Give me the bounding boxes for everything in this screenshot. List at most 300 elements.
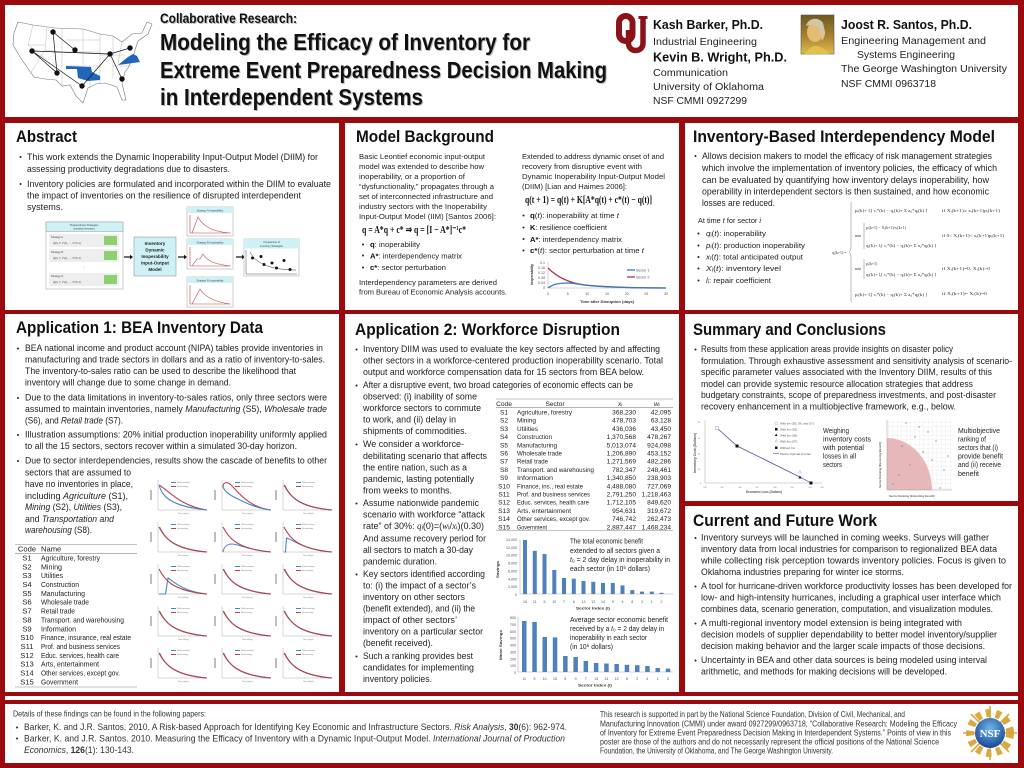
application 2 text: scenario with workforce “attack — [363, 510, 486, 520]
application 2 text: inventory policies. — [363, 674, 432, 684]
references: Economics, 126(1): 130-143. — [24, 745, 134, 755]
line chart: inoperability over time: 0 — [547, 292, 549, 296]
bar chart: mean savings by sector: 500 — [510, 637, 516, 641]
left column text: Input-Output Model (IIM) [Santos 2006]: — [359, 212, 496, 221]
chart S11: No inventory — [241, 611, 252, 614]
caption: weighing inventory costs: inventory costs — [823, 434, 871, 444]
application 2 text: Inventory DIIM was used to evaluate the key sectors affected by and affecting — [363, 344, 660, 354]
authors: George Washington University: Systems Engineering — [857, 50, 955, 61]
application 1 text: Mining (S2), Utilities (S3), — [25, 502, 122, 512]
future work text: Inventory surveys will be launched in coming weeks. Surveys will gather — [701, 532, 989, 542]
equation: piecewise inventory model: min — [855, 267, 861, 271]
application 2 text: to work, and (ii) delay in — [363, 414, 456, 424]
chart S12 — [276, 606, 332, 641]
bar chart: mean savings by sector: 800 — [510, 616, 516, 620]
future work text: arithmetic, and methods for making decisions will be developed. — [701, 666, 947, 676]
table: sector output and workforce: Information — [517, 475, 553, 482]
bar chart: mean savings by sector: 1 — [657, 677, 659, 681]
bar chart: mean savings by sector: 300 — [510, 650, 516, 654]
table: sector codes: Educ. services, health care — [41, 651, 119, 660]
line chart: inoperability over time: 30 — [664, 292, 668, 296]
authors: George Washington University: Joost R. Santos, Ph.D. — [841, 17, 972, 32]
bar chart: mean savings by sector: 6 — [564, 677, 566, 681]
chart S9: Time (days) — [303, 597, 314, 599]
line chart: inoperability over time: Sector 2 — [636, 276, 649, 280]
table: sector codes: Mining — [41, 562, 62, 571]
chart S11: With inventory — [241, 607, 254, 610]
table: sector codes: S5 — [22, 589, 32, 598]
bar chart: mean savings by sector: 9 — [575, 677, 577, 681]
equation: piecewise inventory model: pᵢ(k)+ lᵢ[ cᵢ*(k) − qᵢ(k)+ Σ aᵢⱼ*qⱼ(k) ] — [855, 208, 927, 213]
bar chart: mean savings by sector: 400 — [510, 644, 516, 648]
table: sector output and workforce: Code — [496, 401, 512, 408]
chart S4: Time (days) — [178, 555, 189, 557]
description text: losses are reduced. — [702, 198, 775, 208]
left column text: Basic Leontief economic input-output — [359, 152, 486, 161]
table: sector output and workforce: Retail trade — [517, 459, 548, 466]
application 1 text: BEA national income and product account (NIPA) tables provide inventories in — [25, 343, 323, 353]
panel: summary and conclusions — [685, 314, 1018, 501]
application 2 text: (benefit extended), and (ii) the — [363, 604, 475, 614]
chart S14 — [215, 648, 271, 683]
table: sector codes: Code — [18, 544, 36, 554]
table: sector codes: Other services, except gov. — [41, 668, 120, 678]
diagram: inventory strategies flow: Inoperability — [141, 254, 169, 259]
abstract text: Inventory policies are formulated and incorporated within the DIIM to evaluate — [27, 179, 331, 189]
equation: piecewise inventory model: pᵢ(k)+ lᵢ[ cᵢ*(k) − qᵢ(k)+ Σ aᵢⱼ*qⱼ(k) ] — [855, 292, 927, 297]
table: sector output and workforce: S7 — [500, 459, 508, 466]
table: sector output and workforce: Educ. services, health care — [517, 500, 589, 507]
summary text: Results from these application areas provide insights on disaster policy — [701, 344, 954, 354]
equation: DIIM: q(t + 1) = q(t) + K[A*q(t) + c*(t) − q(t)] — [525, 195, 652, 206]
table: sector output and workforce: 436,036 — [612, 426, 636, 433]
line chart: inoperability over time — [530, 261, 668, 304]
future work text: while collecting risk perception towards inventory policies. Focus is given to — [700, 556, 1006, 566]
annotation: total economic benefit: The total economic benefit — [570, 536, 644, 546]
table: sector codes: Wholesale trade — [41, 598, 89, 607]
application 1 text: to all the 15 sectors, sectors recover within a simulated 30-day horizon. — [25, 441, 297, 451]
chart S10: Time (days) — [178, 639, 189, 641]
summary text: formulation. Through exhaustive assessment and sensitivity analysis of scenario- — [701, 356, 1012, 366]
table: sector output and workforce: xᵢ — [617, 401, 622, 408]
bar chart: total savings by sector: 8,000 — [508, 562, 517, 566]
annotation: average sector benefit: inoperability in each sector — [570, 633, 647, 642]
bar chart: mean savings by sector: 8 — [626, 677, 628, 681]
table: sector output and workforce: 2,791,250 — [607, 492, 636, 498]
diagram: inventory strategies flow: Model — [148, 267, 162, 272]
authors: George Washington University — [841, 17, 1007, 90]
description text: can be evaluated by quantifying how inventory delays inoperability, how — [702, 175, 990, 185]
application 2 text: rate” of 30%: qᵢ(0)=(wᵢ/xᵢ)(0.30) — [363, 521, 484, 531]
icon: NSF seal — [963, 706, 1017, 760]
chart S2 — [215, 480, 271, 515]
bar chart: total savings by sector: Sector Index (i) — [576, 606, 611, 610]
line chart: inoperability over time: 25 — [644, 292, 648, 296]
table: sector codes: Retail trade — [41, 607, 75, 616]
chart S6 — [276, 522, 332, 557]
bar chart: total savings by sector: 10,000 — [506, 554, 517, 558]
table: sector codes: S6 — [22, 598, 32, 607]
diagram: inventory strategies flow: Input-Output — [141, 260, 169, 266]
variable list: At time t for sector i — [698, 216, 761, 225]
equation: piecewise inventory model — [832, 202, 1005, 302]
acknowledgement: Foundation, the University of Oklahoma, and The George Washington University. — [600, 746, 833, 756]
heading: application 1: Application 1: BEA Inventory Data — [16, 318, 264, 337]
line chart: inoperability over time: 0.16 — [538, 266, 545, 270]
application 2 text: Key sectors identified according — [363, 569, 485, 579]
IIM variable list — [362, 240, 462, 272]
caption: multiobjective ranking: provide benefit — [958, 452, 1004, 460]
line chart: inoperability over time: Time after Disruption (days) — [580, 300, 635, 304]
caption: multiobjective ranking — [958, 426, 1004, 478]
caption: multiobjective ranking: ranking of — [958, 434, 987, 444]
table: sector output and workforce: Construction — [517, 434, 552, 441]
variable list: pᵢ(t): production inoperability — [705, 241, 805, 250]
equation: piecewise inventory model: if Xᵢ(k+1)≥ xᵢ(k+1)pᵢ(k+1) — [942, 209, 1001, 213]
authors: George Washington University: NSF CMMI 0963718 — [841, 79, 936, 90]
table: sector output and workforce: S5 — [500, 442, 508, 449]
authors: University of Oklahoma: Kevin B. Wright, Ph.D. — [653, 50, 787, 64]
bar chart: mean savings by sector: Mean Savings — [499, 630, 503, 660]
diagram: inventory strategies flow: Inventory Strategies — [260, 244, 284, 248]
line chart: inoperability over time: 0.04 — [538, 281, 545, 285]
acknowledgement: of Inventory for Extreme Event Preparedness Decision Making in Interdependent Systems.” Points of view in this — [600, 728, 951, 738]
panel: model background — [345, 123, 679, 310]
bar chart: mean savings by sector: 2 — [636, 677, 638, 681]
chart: pareto frontier: Inventory Cost (Dollars) — [693, 433, 697, 473]
bar chart: total savings by sector: 1 — [651, 600, 653, 604]
table: sector output and workforce: 1,218,463 — [642, 492, 671, 498]
bar chart: total savings by sector: 15 — [523, 600, 527, 604]
chart S11: Time (days) — [242, 639, 253, 641]
chart S8 — [215, 564, 271, 599]
title: Collaborative Research: — [161, 12, 298, 27]
bar chart: total savings by sector: 4,000 — [508, 577, 517, 581]
table: sector codes: S1 — [22, 554, 32, 562]
chart S8: With inventory — [241, 565, 254, 568]
line chart: inoperability over time: 5 — [567, 292, 569, 296]
chart S13: No inventory — [177, 653, 188, 656]
IIM variable list: A*: interdependency matrix — [370, 252, 462, 260]
bar chart: mean savings by sector: 7 — [585, 677, 587, 681]
table: sector output and workforce: S8 — [500, 467, 508, 474]
table: sector output and workforce: S12 — [498, 500, 510, 507]
right column text — [522, 152, 665, 191]
abstract text: assessing productivity degradations due to disasters. — [27, 164, 230, 174]
chart S5: No inventory — [241, 527, 252, 530]
line chart: inoperability over time: 15 — [605, 292, 609, 296]
table: sector output and workforce — [496, 399, 673, 531]
bar chart: mean savings by sector: 15 — [553, 677, 557, 681]
table: sector codes: S3 — [22, 571, 32, 580]
chart S11 — [215, 606, 271, 641]
references: Barker, K. and J.R. Santos. 2010. Measuring the Efficacy of Inventory with a Dynamic Input-Output Model. International Journal of Production — [24, 734, 565, 744]
table: sector output and workforce: 2,887,447 — [607, 524, 636, 531]
chart: pareto frontier: 270 — [755, 487, 760, 489]
variable list: xᵢ(t): total anticipated output — [705, 252, 804, 262]
table: sector output and workforce: S9 — [500, 475, 508, 482]
chart: pareto frontier: 280 — [773, 487, 778, 489]
application 1 text: Due to the data limitations in inventory-to-sales ratios, only three sectors were — [25, 392, 327, 402]
table: sector output and workforce: 238,903 — [647, 475, 671, 482]
title: Modeling the Efficacy of Inventory for — [160, 29, 530, 55]
bar chart: total savings by sector: 12 — [591, 600, 595, 604]
chart S8: No inventory — [241, 569, 252, 572]
small multiples: sector recovery curves — [151, 480, 332, 683]
table: sector output and workforce: 368,230 — [612, 410, 636, 416]
equation: piecewise inventory model: qᵢ(k)+ lᵢ[ cᵢ*(k) − qᵢ(k)+ Σ aᵢⱼ*qⱼ(k) ] — [866, 272, 936, 277]
diagram: inventory strategies flow: Strategy N Inoperability — [197, 278, 224, 282]
table: sector output and workforce: Transport. and warehousing — [517, 467, 594, 474]
DIIM variable list — [522, 211, 645, 255]
table: sector output and workforce: 924,098 — [647, 442, 671, 449]
acknowledgement: This research is supported in part by the National Science Foundation, Division of Civil, Mechanical, and — [600, 710, 905, 719]
table: sector codes: S8 — [22, 615, 32, 624]
right column text: recovery from disruptive event with — [522, 162, 642, 171]
chart: pareto frontier: 290 — [790, 487, 795, 489]
bar chart: total savings by sector: 10 — [552, 600, 556, 604]
acknowledgement: Manufacturing Innovation (CMMI) under award 0927299/0963718, “Collaborative Research: Modeling the Efficacy — [600, 720, 957, 728]
chart: pareto frontier: With Inv (S6) — [780, 434, 797, 438]
panel: inventory-based interdependency model — [685, 123, 1018, 310]
table: sector output and workforce: 42,095 — [651, 410, 671, 416]
future work text: Uncertainty in BEA and other data sources is being modeled using interval — [701, 655, 987, 665]
line chart: inoperability over time: 0.08 — [538, 276, 545, 280]
table: sector codes: S4 — [22, 580, 32, 589]
bar chart: mean savings by sector — [499, 616, 673, 688]
application 1 text: including Agriculture (S1), — [25, 491, 128, 501]
left column text: inoperability, or a proportion of — [359, 172, 466, 181]
application 2 text: (benefit received). — [363, 638, 433, 648]
chart: pareto frontier: With Inv (S7) — [780, 440, 797, 444]
annotation: average sector benefit: (in 10⁶ dollars) — [570, 642, 613, 651]
references — [13, 710, 567, 755]
diagram: inventory strategies flow: q(0), T, x*(1), ..., x*(T+1) — [53, 241, 81, 245]
line chart: inoperability over time: 10 — [585, 292, 589, 296]
chart S1: No inventory — [177, 485, 188, 488]
bar chart: mean savings by sector: 14 — [604, 677, 608, 681]
line chart: inoperability over time: 0.12 — [538, 271, 545, 275]
bar chart: total savings by sector: 7 — [563, 600, 565, 604]
DIIM variable list: c*(t): sector perturbation at time t — [530, 246, 645, 255]
diagram: inventory strategies flow — [46, 207, 299, 307]
application 1 text: (S6), and Retail trade (S7). — [25, 416, 123, 426]
application 2 text: candidates for implementing — [363, 662, 474, 672]
table: sector output and workforce: 43,450 — [651, 426, 671, 433]
chart S8: Time (days) — [242, 597, 253, 599]
bar chart: total savings by sector — [496, 538, 673, 610]
equation: piecewise inventory model: if Xᵢ(k+1)=0, Xᵢ(k)>0 — [942, 267, 990, 272]
line chart: inoperability over time: Sector 1 — [636, 268, 649, 272]
table: sector codes: Utilities — [41, 571, 63, 580]
table: sector codes: S14 — [20, 668, 34, 678]
summary text: specific parameter values associated with the Inventory DIIM, results of this — [701, 367, 993, 377]
application 1 text: have no inventories in place, — [25, 479, 133, 489]
diagram: inventory strategies flow: including Inventory — [73, 226, 96, 230]
chart: pareto frontier — [693, 420, 825, 494]
caption: weighing inventory costs — [822, 426, 871, 469]
chart: pareto frontier: 40 — [698, 438, 701, 440]
bar chart: mean savings by sector: 13 — [594, 677, 598, 681]
diagram: inventory strategies flow: Inventory — [145, 241, 166, 246]
application 2 text — [356, 344, 663, 684]
table: sector codes: S13 — [20, 660, 34, 669]
chart S4 — [151, 522, 207, 557]
chart S4: With inventory — [177, 523, 190, 526]
chart: pareto frontier: 16 — [698, 469, 701, 471]
chart S14: Time (days) — [242, 681, 253, 683]
chart S2: Time (days) — [242, 513, 253, 515]
annotation: total economic benefit: extended to all sectors given a — [570, 546, 661, 555]
left column text: industry sectors with the Inoperability — [359, 202, 487, 211]
icon: OU logo — [619, 16, 648, 50]
chart S14: No inventory — [241, 653, 252, 656]
variable list: lᵢ: repair coefficient — [706, 276, 772, 285]
bar chart: total savings by sector: 14,000 — [506, 538, 517, 542]
table: sector output and workforce: 1,206,890 — [607, 450, 636, 458]
bar chart: mean savings by sector: 12 — [615, 677, 619, 681]
table: sector output and workforce: 63,128 — [651, 418, 671, 425]
table: sector output and workforce: Other services, except gov. — [517, 516, 590, 523]
DIIM variable list: A*: interdependency matrix — [530, 235, 622, 244]
acknowledgement: poster are those of the authors and do not necessarily represent the official positions of the National Science — [600, 738, 939, 746]
description text — [694, 151, 997, 208]
chart S7 — [151, 564, 207, 599]
future work text: decision models of supplier dependability to better model inventory/supplier — [701, 630, 997, 640]
chart S2: With inventory — [241, 481, 254, 484]
application 2 text: to: (i) the impact of a sector’s — [363, 580, 477, 590]
bar chart: total savings by sector: 12,000 — [506, 546, 517, 550]
chart: pareto frontier: With Inv (S5, S6, and S7) — [780, 422, 814, 426]
bar chart: mean savings by sector: 700 — [510, 623, 516, 627]
table: sector output and workforce: S13 — [498, 508, 510, 515]
table: sector codes: Prof. and business services — [41, 642, 120, 651]
chart S3: No inventory — [302, 485, 313, 488]
line chart: inoperability over time: 0.1 — [540, 261, 545, 265]
table: sector output and workforce: S1 — [500, 410, 508, 416]
chart S2: No inventory — [241, 485, 252, 488]
application 1 text: Illustration assumptions: 20% initial production inoperability uniformly applied — [25, 430, 327, 440]
table: sector codes: Government — [41, 677, 79, 686]
application 2 text: impact of other sectors’ — [363, 615, 457, 625]
acknowledgement — [600, 710, 957, 756]
application 2 text: pandemic, lasting potentially — [363, 474, 475, 484]
title: Collaborative Research: — [160, 11, 297, 26]
chart S9 — [276, 564, 332, 599]
table: sector output and workforce: S10 — [498, 483, 510, 490]
equation: piecewise inventory model: pᵢ(k+1) — [866, 262, 878, 266]
icon: George Washington portrait — [801, 15, 834, 54]
future work text: Oklahoma industries preparing for winter ice storms. — [701, 567, 904, 577]
caption: multiobjective ranking: benefit — [958, 469, 980, 478]
heading: model background: Model Background — [356, 127, 494, 146]
table: sector codes: S15 — [20, 677, 34, 686]
variable list: qᵢ(t): inoperability — [706, 229, 766, 238]
table: sector codes: S9 — [22, 624, 32, 633]
table: sector output and workforce: Wholesale trade — [517, 450, 562, 458]
chart S3: With inventory — [302, 481, 315, 484]
equation: piecewise inventory model: min — [855, 234, 861, 238]
application 1 text: warehousing (S8). — [25, 525, 92, 535]
table: sector codes: S10 — [20, 633, 34, 642]
application 2 text: pandemic duration. — [363, 556, 437, 566]
diagram: inventory strategies flow: Strategy A Inoperability — [197, 208, 224, 212]
chart S12: Time (days) — [303, 639, 314, 641]
equation: piecewise inventory model: pᵢ(k+1) − Xᵢ(k+1)/xᵢ(k+1) — [866, 226, 907, 230]
bar chart: total savings by sector: 2 — [660, 600, 662, 604]
application 2 text: inventory on a particular sector — [363, 626, 483, 636]
table: sector output and workforce: S2 — [500, 418, 508, 425]
chart S7: No inventory — [177, 569, 188, 572]
chart S15: With inventory — [302, 649, 315, 652]
annotation: average sector benefit: Average sector economic benefit — [570, 615, 669, 624]
chart: pareto frontier: With Inv (S5) — [780, 428, 797, 432]
chart S13: With inventory — [177, 649, 190, 652]
chart S4: No inventory — [177, 527, 188, 530]
application 2 text: output and workforce compensation data for 15 sectors from BEA below. — [363, 367, 644, 377]
left column text: model was extended to describe how — [359, 162, 485, 171]
application 1 text: and Transportation and — [25, 514, 115, 524]
IIM variable list: c*: sector perturbation — [370, 263, 446, 272]
authors: University of Oklahoma: Communication — [653, 68, 728, 79]
chart: pareto frontier: Without Inv — [780, 446, 796, 450]
abstract text: systems. — [27, 202, 63, 212]
diagram: inventory strategies flow: Strategy B — [51, 250, 63, 254]
chart: pareto frontier: 250 — [720, 487, 725, 489]
equation: piecewise inventory model: qᵢ(k)+ lᵢ[ cᵢ*(k) − qᵢ(k)+ Σ aᵢⱼ*qⱼ(k) ] — [866, 243, 936, 248]
chart S3 — [276, 480, 332, 515]
chart S1: Time (days) — [178, 513, 189, 515]
authors: George Washington University: Engineering Management and — [841, 36, 986, 47]
application 2 text: After a disruptive event, two broad categories of economic effects can be — [363, 380, 633, 390]
note: interdependency parameters: from Bureau of Economic Analysis accounts. — [359, 288, 507, 296]
table: sector output and workforce: S11 — [498, 492, 510, 498]
heading: application 2: Application 2: Workforce Disruption — [355, 320, 620, 339]
caption: weighing inventory costs: losses in all — [823, 452, 856, 460]
DIIM variable list: q(t): inoperability at time t — [530, 211, 620, 220]
chart S3: Time (days) — [303, 513, 314, 515]
diagram: inventory strategies flow: q(0), T, x*(1), ..., x*(T+1) — [53, 256, 81, 260]
future work text: A multi-regional inventory model extension is being integrated with — [701, 618, 962, 628]
application 1 text: inventory will change due to some change in demand. — [25, 378, 231, 388]
DIIM variable list: K: resilience coefficient — [530, 223, 608, 232]
table: sector output and workforce: 453,152 — [647, 450, 671, 458]
bar chart: total savings by sector: 9 — [612, 600, 614, 604]
chart S5: With inventory — [241, 523, 254, 526]
application 2 text: the entire nation, such as a — [363, 462, 467, 472]
diagram: inventory strategies flow: ⋮ — [83, 266, 85, 269]
table: sector output and workforce: 849,620 — [647, 500, 671, 507]
abstract text: the impact of inventories on the resilience of disrupted interdependent — [27, 190, 302, 200]
chart S5 — [215, 522, 271, 557]
chart: pareto frontier: 240 — [703, 487, 708, 489]
title: Extreme Event Preparedness Decision Making — [160, 57, 607, 83]
bar chart: mean savings by sector: 100 — [510, 664, 516, 668]
chart: pareto frontier: 0 — [700, 483, 702, 485]
bar chart: total savings by sector: 6,000 — [508, 569, 517, 573]
right column text: Dynamic Inoperability Input-Output Model — [522, 172, 665, 181]
application 1 text: sectors that are assumed to — [25, 468, 131, 478]
table: sector output and workforce: 746,742 — [612, 516, 636, 523]
authors: University of Oklahoma: Industrial Engineering — [653, 37, 757, 48]
application 2 text: Assume nationwide pandemic — [363, 498, 480, 508]
chart S10: No inventory — [177, 611, 188, 614]
chart: pareto frontier: 24 — [698, 454, 701, 456]
references: Barker, K. and J.R. Santos. 2010. A Risk-based Approach for Identifying Key Economic and Infrastructure Sectors. Risk Analysis, 30(6): 962-974. — [24, 722, 567, 732]
bar chart: total savings by sector: 11 — [533, 600, 537, 604]
chart S9: With inventory — [302, 565, 315, 568]
table: sector codes: Agriculture, forestry — [41, 554, 100, 562]
